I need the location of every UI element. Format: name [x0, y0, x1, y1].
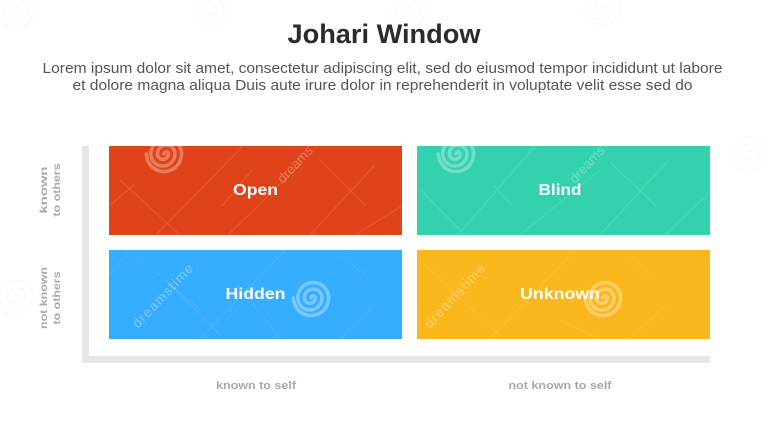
y axis label: not known to others: to others — [51, 271, 63, 325]
label: Blind: Blind — [538, 182, 582, 199]
x axis label: not known to self: not known to self — [508, 380, 612, 392]
panel: unknown: dreamstime — [421, 261, 488, 331]
y axis label: not known to others: not known — [38, 267, 50, 329]
subtitle text — [42, 61, 723, 94]
label: Unknown: Unknown — [520, 286, 600, 303]
panel: open: dreams — [274, 143, 316, 186]
y axis label: not known to others — [38, 267, 63, 329]
background watermark — [0, 0, 766, 315]
subtitle text: Lorem ipsum dolor sit amet, consectetur adipiscing elit, sed do eiusmod tempor incididunt ut labore — [42, 61, 723, 77]
y axis label: known to others: to others — [51, 163, 63, 217]
panel: open — [109, 138, 402, 235]
x axis label: known to self: known to self — [216, 380, 296, 392]
panel: hidden: dreamstime — [129, 261, 196, 331]
label: Hidden: Hidden — [226, 286, 286, 303]
panel: hidden — [109, 250, 402, 339]
panel: blind — [417, 138, 710, 235]
panel: blind: dreams — [566, 143, 608, 186]
title: Johari Window — [288, 19, 481, 49]
label: Open: Open — [233, 182, 278, 199]
subtitle text: et dolore magna aliqua Duis aute irure dolor in reprehenderit in voluptate velit esse sed do — [72, 78, 692, 94]
y axis label: known to others — [38, 163, 63, 216]
axis: vertical and horizontal frame — [82, 146, 710, 363]
panel: unknown — [417, 250, 710, 339]
y axis label: known to others: known — [38, 166, 50, 214]
